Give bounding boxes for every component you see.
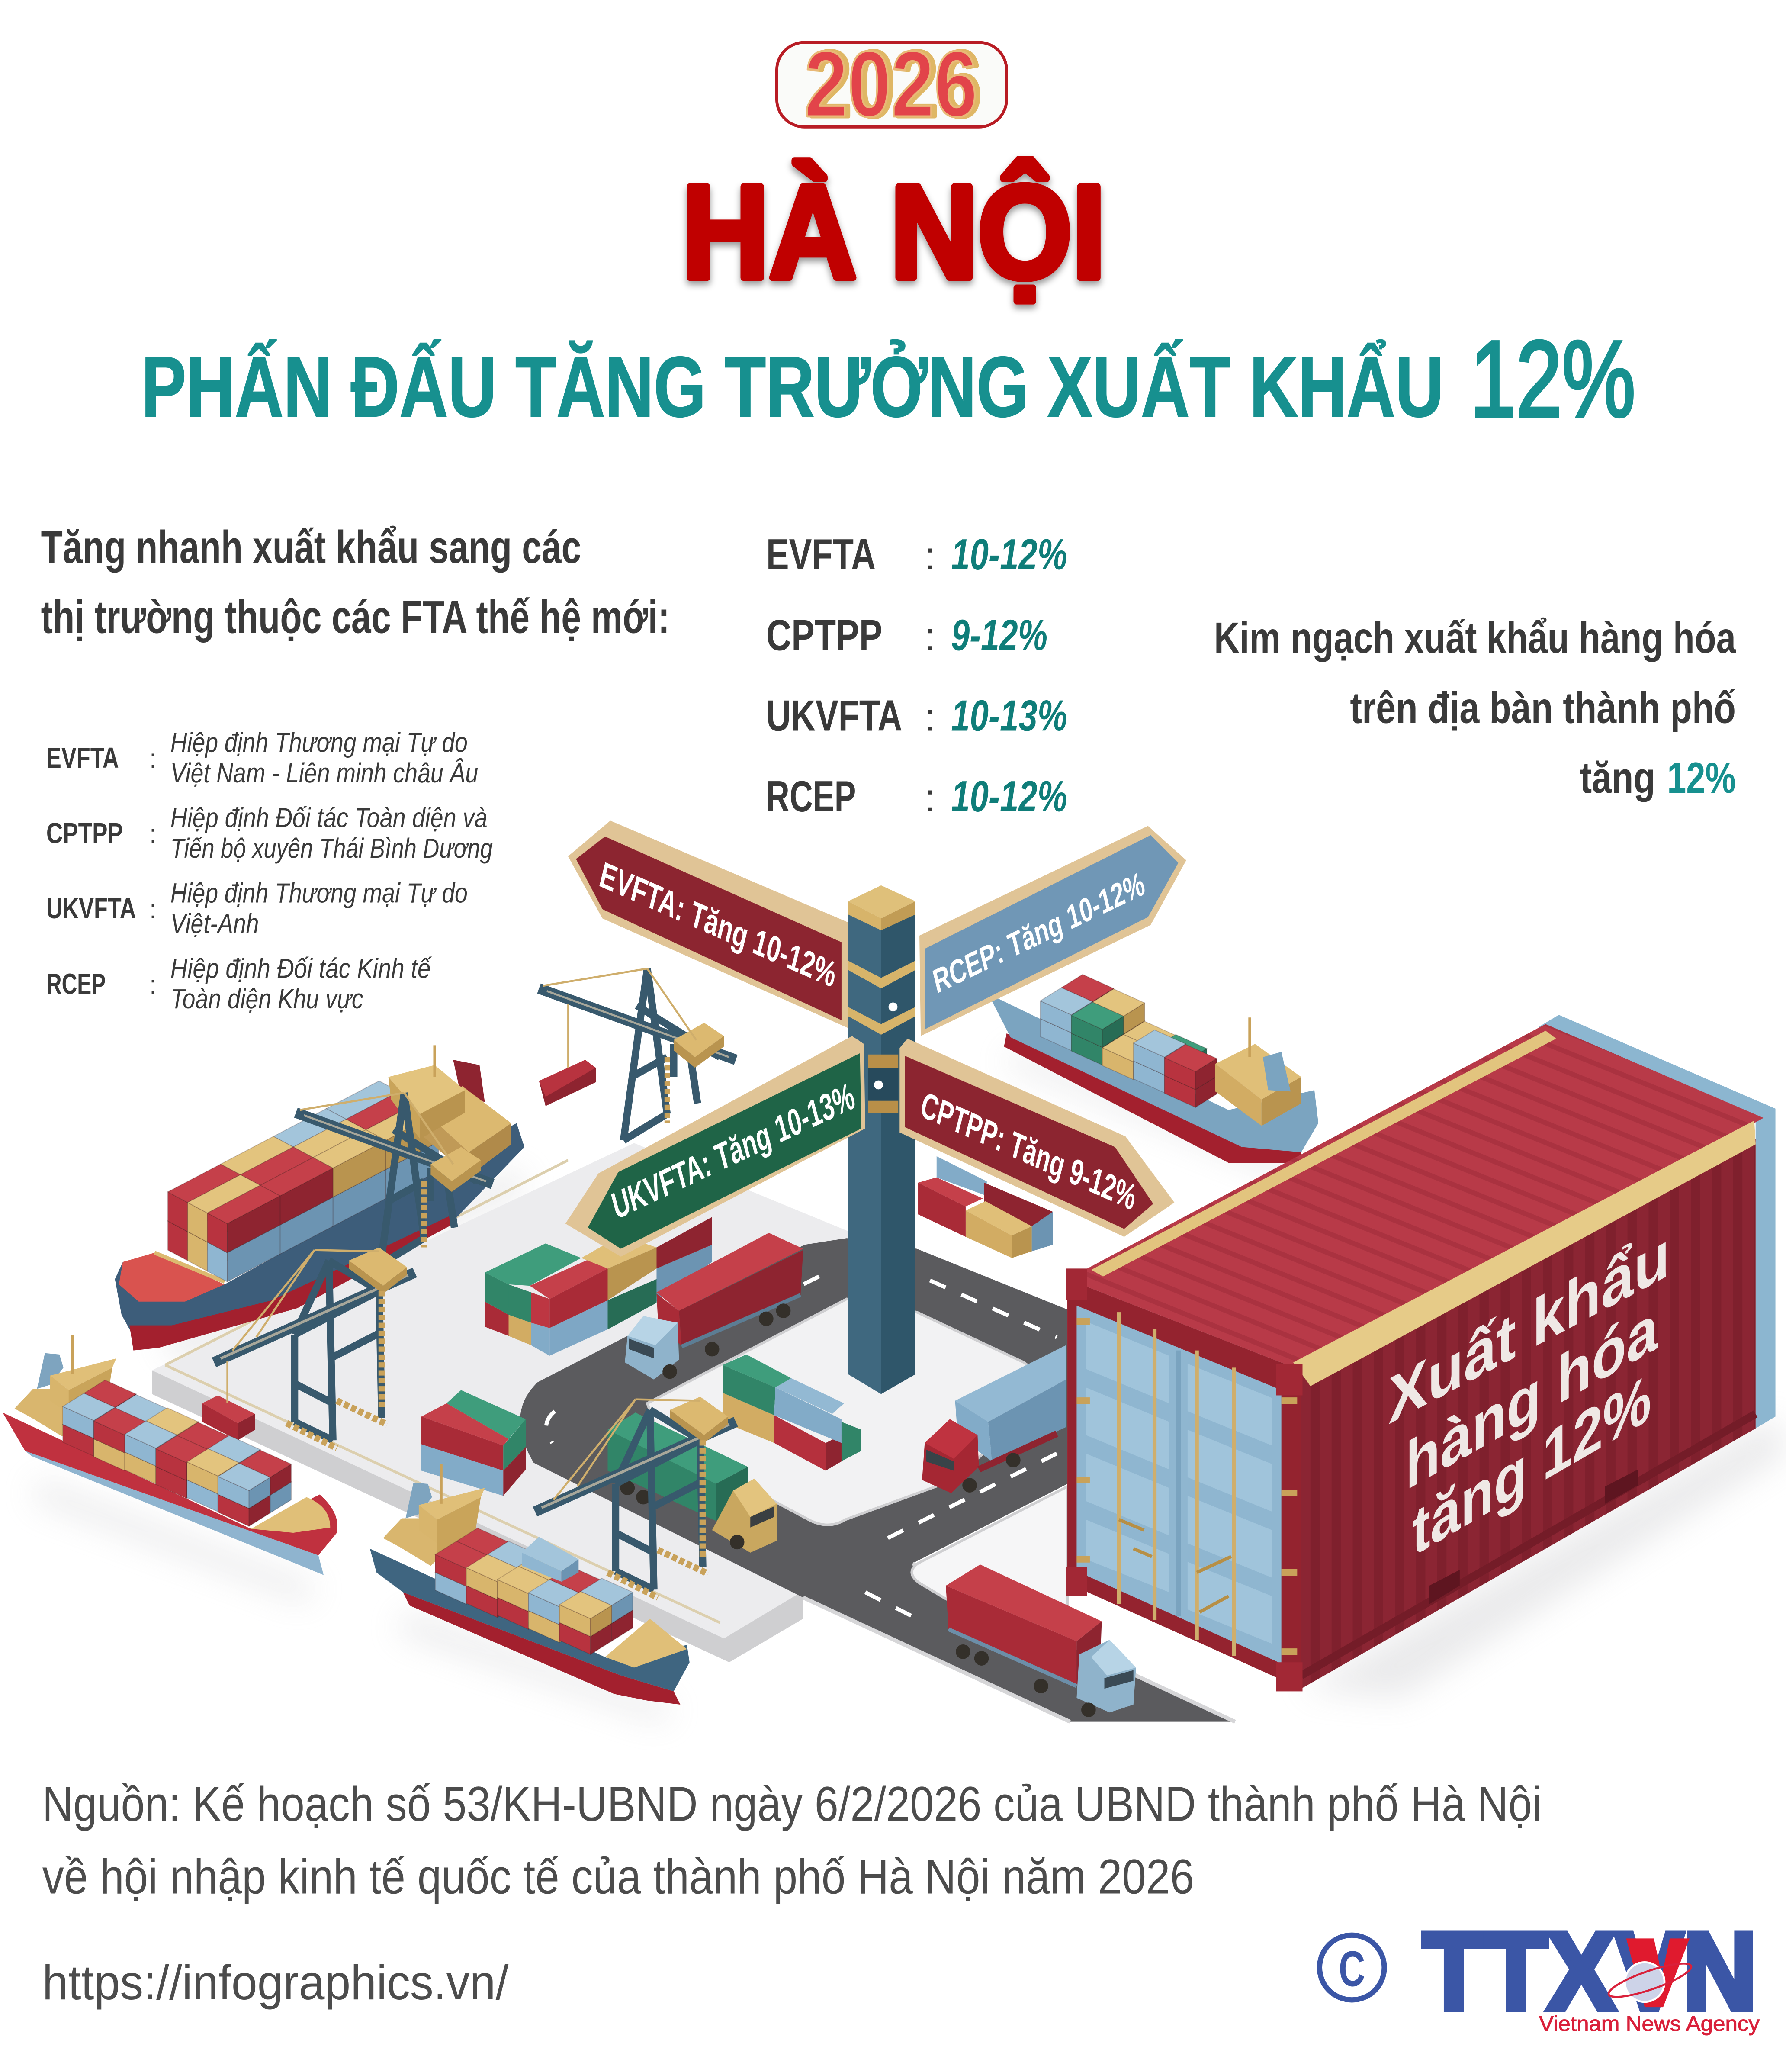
FTA growth targets list [766, 531, 1067, 821]
FTA growth targets list: : [925, 534, 936, 578]
source text: Nguồn: Kế hoạch số 53/KH-UBND ngày 6/2/2026 của UBND thành phố Hà Nội [42, 1777, 1542, 1831]
lower right yard [912, 1486, 1067, 1652]
door end frame [1067, 1279, 1301, 1689]
sign: UKVFTA: UKVFTA: Tăng 10-13% [607, 1075, 859, 1228]
sign: EVFTA [568, 820, 848, 1028]
illustration: port scene [3, 820, 1786, 1722]
glossary: RCEP: Toàn diện Khu vực [170, 983, 363, 1014]
glossary: CPTPP: Hiệp định Đối tác Toàn diện và [170, 802, 488, 833]
crane 1 [539, 968, 736, 1140]
long side [1301, 1139, 1756, 1689]
glossary: RCEP [46, 953, 432, 1014]
forklift pockets [1429, 1570, 1460, 1604]
sign: RCEP: RCEP: Tăng 10-12% [929, 865, 1148, 1001]
container stack 3 [723, 1355, 861, 1471]
intro text block [41, 521, 670, 643]
glossary: EVFTA: Hiệp định Thương mại Tự do [170, 727, 468, 758]
glossary: RCEP: Hiệp định Đối tác Kinh tế [170, 953, 432, 984]
funnel [453, 1060, 485, 1102]
ground shadows [33, 1051, 1786, 1722]
glossary: UKVFTA [46, 878, 468, 939]
superstructure [389, 1045, 511, 1176]
hull [115, 1123, 524, 1338]
bridge and funnel [15, 1335, 116, 1436]
website url: https://infographics.vn/ [42, 1955, 509, 2010]
FTA growth targets list: : [925, 776, 936, 820]
heading: export growth target: PHẤN ĐẤU TĂNG TRƯỞNG XUẤT KHẨU [141, 339, 1444, 434]
intro text block: Tăng nhanh xuất khẩu sang các [41, 521, 581, 573]
ship 3: bottom centre [370, 1464, 690, 1705]
FTA growth targets list: RCEP [766, 772, 856, 821]
glossary: CPTPP: CPTPP [46, 817, 123, 849]
glossary: CPTPP: : [149, 819, 157, 849]
truck: tan cab, green trailer [607, 1412, 777, 1553]
glossary: CPTPP [46, 802, 493, 864]
ship 1: top left [115, 1045, 524, 1351]
FTA growth targets list: EVFTA [766, 531, 876, 579]
containers [435, 1528, 633, 1654]
crane 4 [535, 1397, 736, 1598]
hanging blue container [522, 1537, 578, 1582]
FTA growth targets list: UKVFTA [766, 692, 902, 740]
container stack 1 [485, 1217, 712, 1356]
logo: TTXVN: TTXVN [1423, 1910, 1757, 2033]
glossary: RCEP: RCEP [46, 968, 106, 1000]
container stack 2 [421, 1390, 526, 1496]
source text [42, 1777, 1542, 1904]
goods export turnover note: tăng [1580, 754, 1655, 802]
signpost [565, 820, 1186, 1394]
intro text block: thị trường thuộc các FTA thế hệ mới: [41, 591, 670, 643]
source text: về hội nhập kinh tế quốc tế của thành phố Hà Nội năm 2026 [42, 1850, 1194, 1904]
container label: Xuất khẩu [1388, 1215, 1670, 1438]
glossary: UKVFTA: Việt-Anh [170, 908, 259, 939]
sign: CPTPP: CPTPP: Tăng 9-12% [917, 1084, 1140, 1218]
bridge and funnel [1215, 1017, 1301, 1126]
FTA growth targets list: 10-12% [951, 772, 1067, 821]
glossary: CPTPP: Tiến bộ xuyên Thái Bình Dương [170, 833, 493, 864]
glossary: EVFTA: EVFTA [46, 742, 119, 774]
sign: CPTPP [899, 1039, 1174, 1237]
FTA growth targets list: : [925, 695, 936, 740]
glossary: UKVFTA: : [149, 894, 157, 924]
post [848, 885, 915, 1394]
sign: EVFTA: EVFTA: Tăng 10-12% [596, 854, 841, 995]
glossary: UKVFTA: UKVFTA [46, 892, 136, 925]
corner castings [1066, 1268, 1303, 1691]
truck: blue cab, red trailer [625, 1233, 803, 1380]
container label: tăng 12% [1412, 1359, 1651, 1570]
tan top rail, near edge [1293, 1120, 1756, 1386]
title: Hà Nội: HÀ NỘI [681, 158, 1106, 306]
crane 3 [202, 1248, 415, 1448]
hanging red container [202, 1361, 255, 1440]
FTA growth targets list: 10-13% [951, 692, 1067, 740]
door panels [1076, 1306, 1297, 1663]
FTA glossary [46, 727, 493, 1014]
FTA growth targets list: CPTPP [766, 611, 883, 660]
hull [370, 1549, 690, 1691]
FTA growth targets list: 9-12% [951, 611, 1047, 660]
container stack 4 [918, 1156, 1053, 1258]
containers [1040, 975, 1217, 1107]
bridge and funnel [383, 1464, 485, 1566]
goods export turnover note [1214, 614, 1736, 802]
inner yard block [647, 1299, 1057, 1525]
tan top rail, far edge [1091, 1031, 1556, 1277]
lower hull [25, 1451, 324, 1575]
quay platform [152, 1143, 859, 1662]
hanging red container [539, 1004, 596, 1106]
glossary: UKVFTA: Hiệp định Thương mại Tự do [170, 878, 468, 909]
copyright mark: C [1339, 1940, 1365, 1997]
road network [520, 1238, 1235, 1722]
logo: TTXVN: Vietnam News Agency [1539, 2012, 1760, 2036]
goods export turnover note: 12% [1667, 754, 1736, 802]
container label [1388, 1215, 1670, 1570]
hull [1004, 1033, 1301, 1163]
containers [63, 1380, 291, 1526]
red hull [3, 1412, 337, 1555]
year badge: 2026 [804, 32, 977, 136]
containers [168, 1081, 439, 1282]
large export container [1066, 1015, 1776, 1691]
truck: blue cab, red trailer, bottom [946, 1564, 1136, 1717]
container label: hàng hóa [1406, 1287, 1658, 1505]
crane 2 [296, 1093, 493, 1264]
glossary: EVFTA: Việt Nam - Liên minh châu Âu [170, 757, 478, 788]
copyright mark [1320, 1935, 1384, 2000]
glossary: EVFTA: : [149, 744, 157, 773]
sign: UKVFTA [565, 1036, 865, 1257]
year badge: 2026 [809, 32, 982, 136]
truck: red cab, blue trailer [922, 1345, 1066, 1493]
glossary: RCEP: : [149, 970, 157, 999]
FTA growth targets list: : [925, 615, 936, 659]
glossary: EVFTA [46, 727, 478, 788]
ship 4: top right [988, 975, 1318, 1163]
bow deck [251, 1497, 330, 1533]
back frame [1539, 1015, 1776, 1429]
roof [1067, 1024, 1764, 1370]
FTA growth targets list: 10-12% [951, 531, 1067, 579]
heading: export growth target: 12% [1470, 319, 1635, 440]
ship 2: bottom left [3, 1335, 337, 1575]
